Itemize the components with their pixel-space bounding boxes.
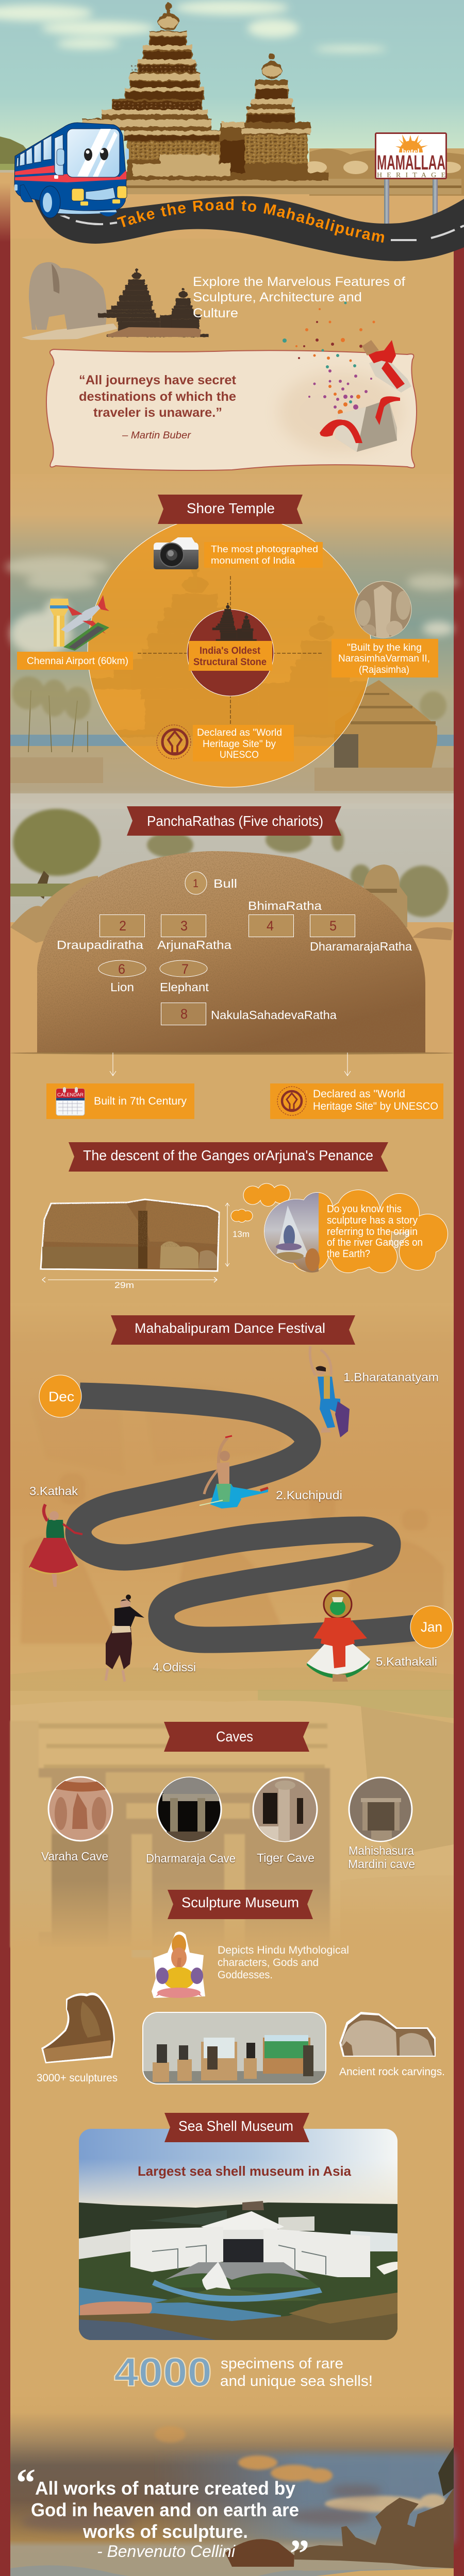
icon: stone elephant — [22, 262, 118, 340]
road centre dashes — [60, 215, 464, 240]
callout: declared unesco — [270, 1083, 443, 1119]
label 6 lion: 6 — [118, 961, 125, 977]
callout: chennai airport — [17, 652, 133, 670]
callout: photographed — [204, 542, 323, 568]
heading: sculpture museum — [168, 1890, 313, 1919]
icon: small shore temple — [98, 268, 209, 337]
heading: pancharathas — [127, 806, 341, 836]
label: 4.odissi: 4.Odissi — [153, 1660, 196, 1674]
callout: built by the king: (Rajasimha) — [359, 665, 409, 675]
label: 5.kathakali: 5.Kathakali — [376, 1655, 437, 1668]
cave: tiger — [253, 1777, 317, 1842]
arrow: to century box — [110, 1053, 116, 1076]
centre label — [193, 646, 267, 668]
intro text: Sculpture, Architecture and — [193, 290, 362, 304]
callout: declared unesco: Heritage Site" by UNESCO — [313, 1100, 438, 1112]
label 8 nakulasahadevaratha: NakulaSahadevaRatha — [211, 1008, 337, 1022]
heading: sculpture museum: Sculpture Museum — [181, 1894, 299, 1910]
centre label: India's Oldest — [200, 646, 261, 656]
winding timeline road — [78, 1396, 415, 1640]
month: jan: Jan — [421, 1619, 442, 1635]
quote lines: All works of nature created by — [35, 2478, 295, 2499]
icon: elephant rock carving — [339, 2012, 436, 2057]
icon: cartoon bus — [14, 123, 129, 218]
arrow: height 13m — [225, 1203, 250, 1266]
heading: dance festival: Mahabalipuram Dance Festival — [135, 1320, 325, 1336]
panel: dance festival background — [10, 1303, 454, 1700]
icon: ganesha — [152, 1931, 205, 1998]
quote author: - Benvenuto Cellini — [97, 2542, 236, 2561]
intro text: Explore the Marvelous Features of — [193, 275, 405, 289]
label: 3.kathak: 3.Kathak — [29, 1484, 78, 1498]
arrow: height 13m: 13m — [233, 1229, 250, 1239]
label 3 arjunaratha — [157, 915, 231, 952]
right border — [454, 247, 464, 2576]
dancer 3: kathak — [29, 1504, 82, 1587]
dancer 5: kathakali — [307, 1590, 370, 1682]
bubble text: sculpture has a story — [327, 1215, 418, 1226]
callout: world heritage site: Heritage Site" by — [203, 739, 276, 750]
arrow: width 29m: 29m — [114, 1280, 134, 1290]
label 7 elephant: 7 — [181, 961, 189, 977]
panel: pancharathas background photo — [10, 793, 454, 1054]
left border — [0, 242, 10, 2576]
label 2 draupadiratha — [57, 915, 144, 952]
heading: sea shell museum: Sea Shell Museum — [178, 2118, 293, 2134]
heading: descent of the ganges: The descent of the Ganges orArjuna's Penance — [83, 1147, 373, 1163]
cave: varaha — [48, 1777, 113, 1841]
arrow: to unesco box — [344, 1053, 351, 1076]
cave labels: Tiger Cave — [257, 1851, 314, 1865]
arjuna's penance relief image — [41, 1199, 219, 1271]
bubble text: referring to the origin — [327, 1226, 418, 1238]
sea shell museum photo — [79, 2129, 397, 2340]
cave labels: Mahishasura — [349, 1844, 414, 1857]
icon: airport tower and plane — [49, 595, 109, 651]
label 1 bull — [185, 872, 237, 894]
cave: mahishasura — [349, 1777, 412, 1841]
logo sign board: hotel — [402, 148, 420, 156]
icon: camera — [154, 537, 198, 569]
icon: calendar — [56, 1087, 85, 1115]
icon: unesco emblem — [157, 725, 191, 759]
callout: built in 7th century: Built in 7th Century — [94, 1095, 187, 1107]
logo sign board: HERITAGE — [377, 172, 445, 179]
stat: 4000 specimens: specimens of rare — [221, 2355, 343, 2372]
stat: 4000 specimens: and unique sea shells! — [220, 2373, 373, 2389]
label 5 dharamarajaratha: 5 — [329, 918, 337, 934]
heading: descent of the ganges — [69, 1142, 388, 1172]
cave labels: Mardini cave — [348, 1857, 415, 1871]
label 8 nakulasahadevaratha — [161, 1003, 337, 1025]
callout: declared unesco: Declared as "World — [313, 1088, 405, 1100]
icon: unesco emblem — [277, 1087, 306, 1115]
caption: largest sea shell museum: Largest sea shell museum in Asia — [138, 2163, 352, 2179]
label 2 draupadiratha: Draupadiratha — [57, 938, 143, 952]
label 7 elephant — [160, 960, 209, 994]
heading: caves — [164, 1722, 309, 1752]
thought bubble small — [231, 1209, 253, 1223]
intro text: Culture — [193, 306, 238, 320]
rock with labels — [10, 850, 454, 1055]
temple side view — [335, 680, 437, 773]
dancer 1: bharatanatyam — [310, 1346, 350, 1437]
bubble text — [327, 1204, 423, 1260]
label: ancient rock carvings: Ancient rock carvings. — [339, 2066, 445, 2078]
stat: 4000 specimens: 4000 — [114, 2349, 212, 2395]
label: 2.kuchipudi: 2.Kuchipudi — [276, 1488, 342, 1502]
coastal rocks — [294, 2488, 454, 2568]
quote text: “All journeys have secret — [79, 373, 237, 387]
rock wall — [10, 757, 454, 791]
cave labels — [41, 1844, 415, 1871]
month: dec: Dec — [48, 1389, 74, 1404]
painting of shiva — [264, 1193, 320, 1273]
heading: shore temple — [158, 495, 303, 524]
label: 1.bharatanatyam: 1.Bharatanatyam — [343, 1370, 439, 1384]
label 1 bull: Bull — [213, 877, 237, 890]
panel: sunset beach quote background — [10, 2391, 454, 2576]
heading: shore temple: Shore Temple — [187, 500, 275, 516]
callout: world heritage site: UNESCO — [220, 750, 259, 760]
callout: chennai airport: Chennai Airport (60km) — [27, 656, 128, 667]
quote lines — [31, 2478, 299, 2542]
callout: photographed: monument of India — [211, 555, 295, 566]
callout: photographed: The most photographed — [211, 544, 318, 554]
callout: built by the king — [332, 639, 438, 677]
trees — [28, 690, 88, 752]
road ribbon — [34, 196, 464, 261]
month: jan — [410, 1606, 453, 1648]
panel: shore temple background photo — [5, 474, 459, 809]
panel: quote scroll — [46, 349, 417, 470]
label 8 nakulasahadevaratha: 8 — [180, 1006, 188, 1022]
callout: built by the king: NarasimhaVarman II, — [338, 653, 430, 664]
panel: caves background — [10, 1690, 454, 1958]
label 4 bhimaratha — [248, 899, 322, 937]
label 4 bhimaratha: 4 — [267, 918, 274, 934]
label 6 lion: Lion — [110, 980, 134, 994]
ganesha description — [218, 1944, 349, 1981]
bubble text: Do you know this — [327, 1204, 402, 1215]
label 5 dharamarajaratha — [310, 915, 412, 953]
month: dec — [39, 1375, 81, 1417]
icon: stone sculpture — [41, 1993, 115, 2063]
label 4 bhimaratha: BhimaRatha — [248, 899, 322, 912]
label 3 arjunaratha: 3 — [180, 918, 188, 934]
callout: built in 7th century — [46, 1083, 194, 1119]
label 7 elephant: Elephant — [160, 980, 209, 994]
quote: benvenuto cellini — [16, 2461, 309, 2575]
icon: calendar: CALENDAR — [57, 1092, 84, 1097]
centre label: Structural Stone — [193, 657, 267, 668]
ganesha description: Depicts Hindu Mythological — [218, 1944, 349, 1956]
callout: world heritage site — [193, 725, 294, 761]
logo sign board — [375, 133, 446, 227]
small temple base — [107, 327, 201, 337]
quote lines: works of sculpture. — [82, 2521, 248, 2542]
bubble text: of the river Ganges on — [327, 1237, 423, 1248]
callout: world heritage site: Declared as "World — [197, 727, 282, 738]
thought bubble: ganges story — [260, 1185, 448, 1275]
callout: built by the king: "Built by the king — [347, 642, 422, 653]
dancer 4: odissi — [106, 1595, 144, 1682]
panel: shore temple circle — [88, 514, 391, 787]
ganesha description: Goddesses. — [218, 1969, 273, 1981]
label 1 bull: 1 — [193, 877, 198, 890]
centre oval — [187, 603, 274, 696]
label 3 arjunaratha: ArjunaRatha — [157, 938, 231, 952]
label: 3000+ sculptures: 3000+ sculptures — [37, 2072, 118, 2084]
left border fade — [0, 183, 10, 242]
icon: sculpture medallion — [355, 581, 411, 638]
quote lines: God in heaven and on earth are — [31, 2499, 299, 2520]
label 5 dharamarajaratha: DharamarajaRatha — [310, 940, 412, 953]
title on road: Take the Road to Mahabalipuram — [117, 199, 385, 243]
bubble text: the Earth? — [327, 1248, 370, 1260]
stat: 4000 specimens — [114, 2349, 373, 2395]
dancer 2: kuchipudi — [200, 1436, 268, 1509]
museum interior photo — [142, 2012, 326, 2084]
dashed connectors — [138, 576, 323, 724]
label 6 lion — [98, 960, 146, 994]
hero: shore temple photograph — [0, 0, 464, 239]
heading: pancharathas: PanchaRathas (Five chariots) — [147, 813, 323, 829]
intro text — [193, 275, 405, 320]
cave: dharmaraja — [157, 1777, 222, 1842]
label 2 draupadiratha: 2 — [119, 918, 126, 934]
cave labels: Dharmaraja Cave — [146, 1852, 236, 1865]
arrow: width 29m — [42, 1277, 217, 1290]
quote text: traveler is unaware.” — [93, 405, 222, 420]
icon: gift box with confetti — [278, 302, 411, 453]
heading: dance festival — [111, 1315, 355, 1345]
quote author: – Martin Buber — [122, 430, 191, 441]
thought bubble medium — [243, 1183, 291, 1207]
heading: sea shell museum — [164, 2113, 309, 2142]
open quote mark: “ — [16, 2461, 36, 2504]
quote text — [79, 373, 237, 420]
close quote mark: ” — [290, 2532, 309, 2575]
cave labels: Varaha Cave — [41, 1850, 108, 1863]
ganesha description: characters, Gods and — [218, 1957, 319, 1969]
heading: caves: Caves — [216, 1728, 253, 1744]
quote text: destinations of which the — [79, 389, 236, 404]
